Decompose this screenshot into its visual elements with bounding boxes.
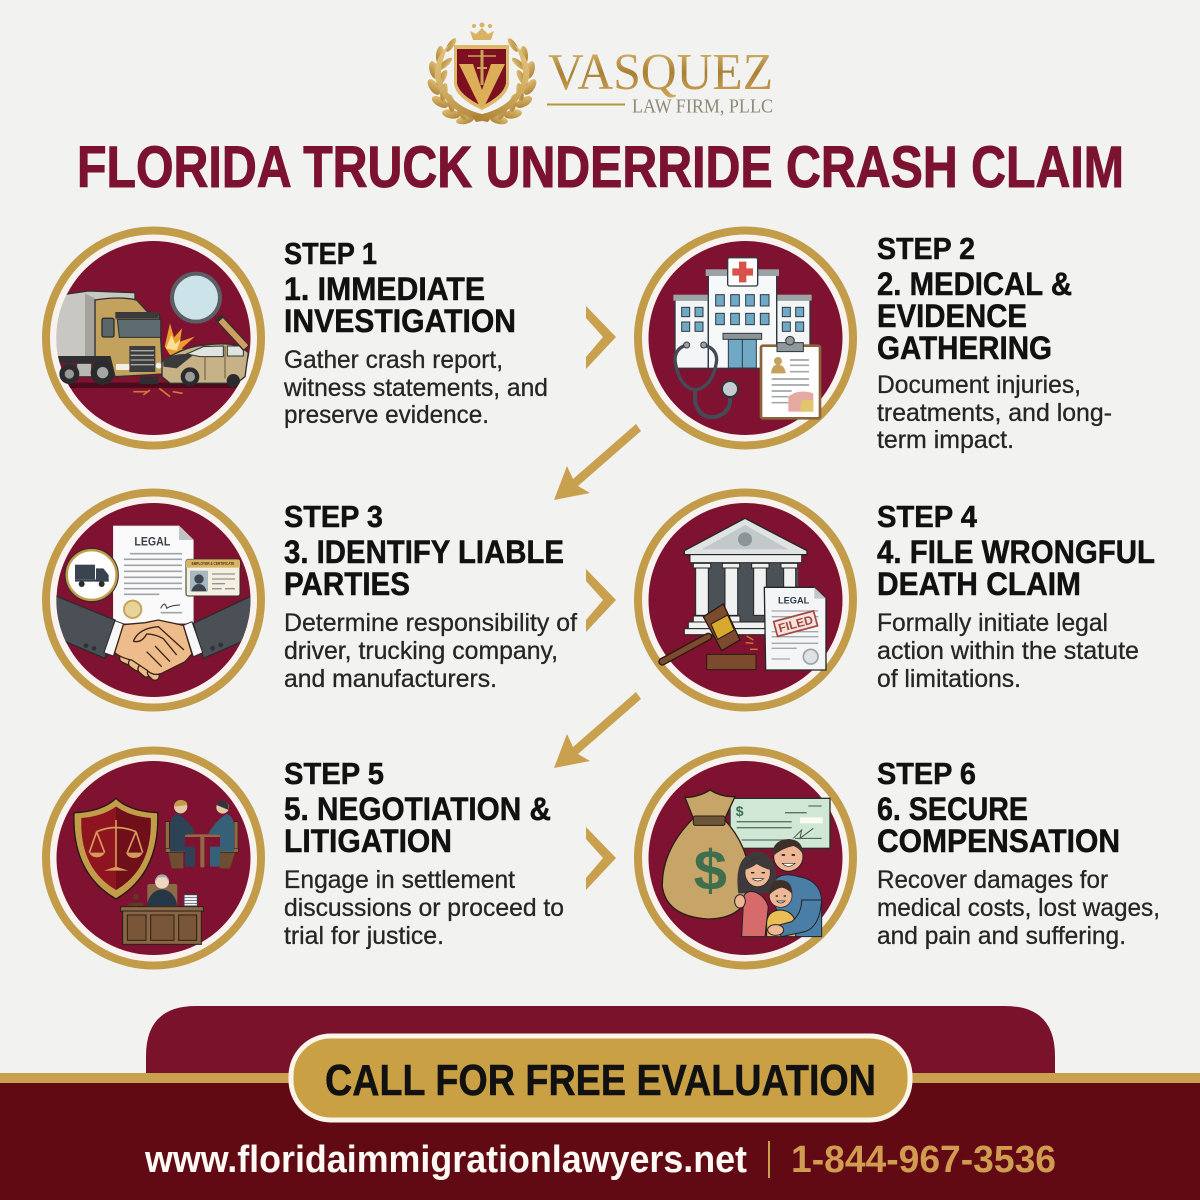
contact phone: 1-844-967-3536	[791, 1139, 1056, 1181]
call to action button	[291, 1036, 910, 1120]
text block: step 5: STEP 5	[284, 756, 384, 791]
panel: step 2 icon	[638, 230, 853, 446]
text block: step 6: medical costs, lost wages,	[877, 894, 1160, 922]
text block: step 4: 4. FILE WRONGFUL	[877, 534, 1155, 570]
text block: step 1: Gather crash report,	[284, 346, 503, 374]
text block: step 6: 6. SECURE	[877, 791, 1028, 827]
icon: shield, negotiation and judge	[74, 798, 238, 944]
icon: courthouse, gavel and filed document	[662, 518, 826, 670]
text block: step 5: Engage in settlement	[284, 866, 515, 894]
diagonal arrow 2 to 3	[554, 424, 641, 500]
panel: step 3 icon	[46, 492, 261, 708]
icon: money bag, check and family: $	[736, 803, 744, 819]
text block: step 1: 1. IMMEDIATE	[284, 271, 485, 307]
text block: step 4: DEATH CLAIM	[877, 566, 1081, 602]
text block: step 2: Document injuries,	[877, 371, 1081, 399]
chevron arrow 1 to 2	[586, 306, 616, 369]
icon: crown	[470, 22, 494, 40]
text block: step 6: COMPENSATION	[877, 823, 1120, 859]
text block: step 4: action within the statute	[877, 637, 1139, 665]
text block: step 2: term impact.	[877, 426, 1014, 454]
text block: step 1: witness statements, and	[283, 374, 548, 402]
text block: step 5: 5. NEGOTIATION &	[284, 791, 551, 827]
icon: courthouse, gavel and filed document: FILED	[777, 613, 815, 635]
text block: step 4: of limitations.	[877, 665, 1021, 693]
chevron arrow 5 to 6	[586, 827, 616, 890]
panel: step 5 icon	[46, 750, 261, 966]
text block: step 3: and manufacturers.	[284, 665, 497, 693]
text block: step 2: 2. MEDICAL &	[877, 266, 1072, 302]
icon: shield	[454, 45, 509, 110]
text block: step 4: Formally initiate legal	[877, 609, 1108, 637]
icon: laurel wreath	[425, 37, 539, 126]
text block: step 2: treatments, and long-	[877, 399, 1112, 427]
text block: step 1: STEP 1	[284, 236, 377, 271]
text block: step 1: preserve evidence.	[284, 401, 489, 429]
text block: step 2	[877, 231, 1112, 454]
icon: legal document and handshake	[53, 526, 253, 682]
text block: step 2: GATHERING	[877, 330, 1052, 366]
text block: step 1	[283, 236, 548, 429]
text block: step 3: driver, trucking company,	[284, 637, 558, 665]
text block: step 6: STEP 6	[877, 756, 976, 791]
text block: step 1: INVESTIGATION	[284, 303, 516, 339]
logo	[425, 22, 773, 126]
panel: step 1 icon	[46, 230, 261, 446]
text block: step 6	[877, 756, 1160, 950]
text block: step 3: Determine responsibility of	[284, 609, 577, 637]
text block: step 5	[284, 756, 564, 950]
icon: money bag, check and family: $	[694, 840, 727, 903]
text block: step 6: Recover damages for	[877, 866, 1108, 894]
text block: step 2: EVIDENCE	[877, 298, 1027, 334]
text block: step 4	[877, 499, 1155, 693]
firm name: VASQUEZ	[548, 44, 773, 101]
contact website: www.floridaimmigrationlawyers.net	[144, 1139, 747, 1181]
text block: step 2: STEP 2	[877, 231, 975, 266]
panel: step 4 icon	[638, 492, 853, 708]
text block: step 3	[284, 499, 577, 693]
text block: step 5: trial for justice.	[284, 922, 444, 950]
text block: step 3: STEP 3	[284, 499, 383, 534]
chevron arrow 3 to 4	[586, 569, 616, 632]
firm subtitle: LAW FIRM, PLLC	[632, 96, 773, 118]
text block: step 3: PARTIES	[284, 566, 410, 602]
text block: step 4: STEP 4	[877, 499, 978, 534]
icon: money bag, check and family	[662, 790, 830, 937]
text block: step 6: and pain and suffering.	[877, 922, 1126, 950]
text block: step 5: discussions or proceed to	[284, 894, 564, 922]
text block: step 5: LITIGATION	[284, 823, 452, 859]
diagonal arrow 4 to 5	[554, 692, 641, 768]
icon: legal document and handshake: LEGAL	[134, 535, 170, 549]
icon: truck crash with magnifier	[53, 274, 252, 397]
panel: step 6 icon	[638, 750, 853, 966]
icon: hospital with stethoscope and chart	[670, 258, 820, 418]
call to action button: CALL FOR FREE EVALUATION	[325, 1056, 876, 1105]
icon: courthouse, gavel and filed document: LEGAL	[778, 595, 810, 605]
icon: legal document and handshake: EMPLOYER & CERTIFICATE	[192, 561, 234, 566]
text block: step 3: 3. IDENTIFY LIABLE	[284, 534, 564, 570]
footer band	[0, 1006, 1200, 1200]
